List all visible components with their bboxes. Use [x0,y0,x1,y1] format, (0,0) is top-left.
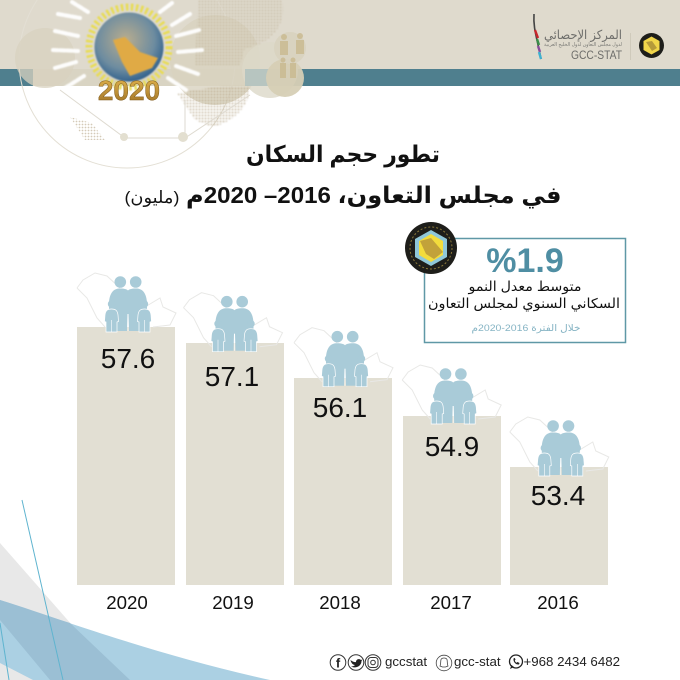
icon: family 2016 [510,417,609,476]
globe rays [53,2,202,90]
callout line 1: متوسط معدل النمو [467,279,582,295]
decorative curves bottom-left [0,500,270,680]
arabian peninsula on globe [113,37,158,76]
icon: family 2018 [294,328,393,387]
bar 2020 [77,327,175,613]
header band: beige strip [0,0,680,69]
icon: whatsapp [510,655,522,669]
icon: facebook: f [336,656,341,670]
bar 2016 [510,467,608,613]
bar 2016: 2016 [537,592,579,613]
logo Latin name: GCC-STAT [571,48,623,62]
bar 2017 [403,416,501,613]
decorative header artwork: world map and globe [15,0,306,168]
bar 2020: 57.6 [101,343,155,374]
phone number: +968 2434 6482 [524,654,620,669]
bar 2019: 57.1 [205,361,259,392]
logo Arabic name: المركز الإحصائي [544,28,622,43]
icon: family 2017 [402,365,501,424]
icon: facebook [330,655,346,670]
callout: growth rate [424,238,626,342]
bar 2018: 56.1 [313,392,367,423]
logo: GCC-STAT [534,14,623,62]
callout frame [424,238,626,342]
callout value: %1.9 [486,242,564,280]
bar 2019 [186,343,284,613]
icon: family 2020 [77,273,176,332]
callout line 2: السكاني السنوي لمجلس التعاون [428,296,620,312]
bar 2019: 2019 [212,592,254,613]
title line 2: في مجلس التعاون، 2016– 2020م (مليون) [124,182,561,209]
icon: family 2019 [184,293,282,352]
icon: instagram [365,655,381,670]
GCC emblem: header [639,33,664,58]
GCC emblem: callout [405,222,457,274]
gold 2020: 2020 [98,75,160,106]
bar 2020: 2020 [106,592,148,613]
bar 2018 [294,378,392,613]
bar 2017: 54.9 [425,431,479,462]
icon: snapchat [436,655,452,671]
globe halo [89,7,169,87]
logo stripe [534,14,541,59]
title [124,141,561,209]
logo subtitle: لدول مجلس التعاون لدول الخليج العربية [544,42,622,48]
callout period: خلال الفترة 2016-2020م [472,323,581,334]
header band: teal strip [0,69,680,86]
bar chart [77,327,608,613]
title line 1: تطور حجم السكان [246,141,440,168]
bar 2016: 53.4 [531,480,585,511]
handle: gccstat: gccstat [385,654,427,669]
globe [94,12,164,82]
footer social links [330,654,620,671]
bar 2018: 2018 [319,592,361,613]
handle: gcc-stat: gcc-stat [454,654,501,669]
icon: twitter [348,655,364,670]
bar 2017: 2017 [430,592,472,613]
